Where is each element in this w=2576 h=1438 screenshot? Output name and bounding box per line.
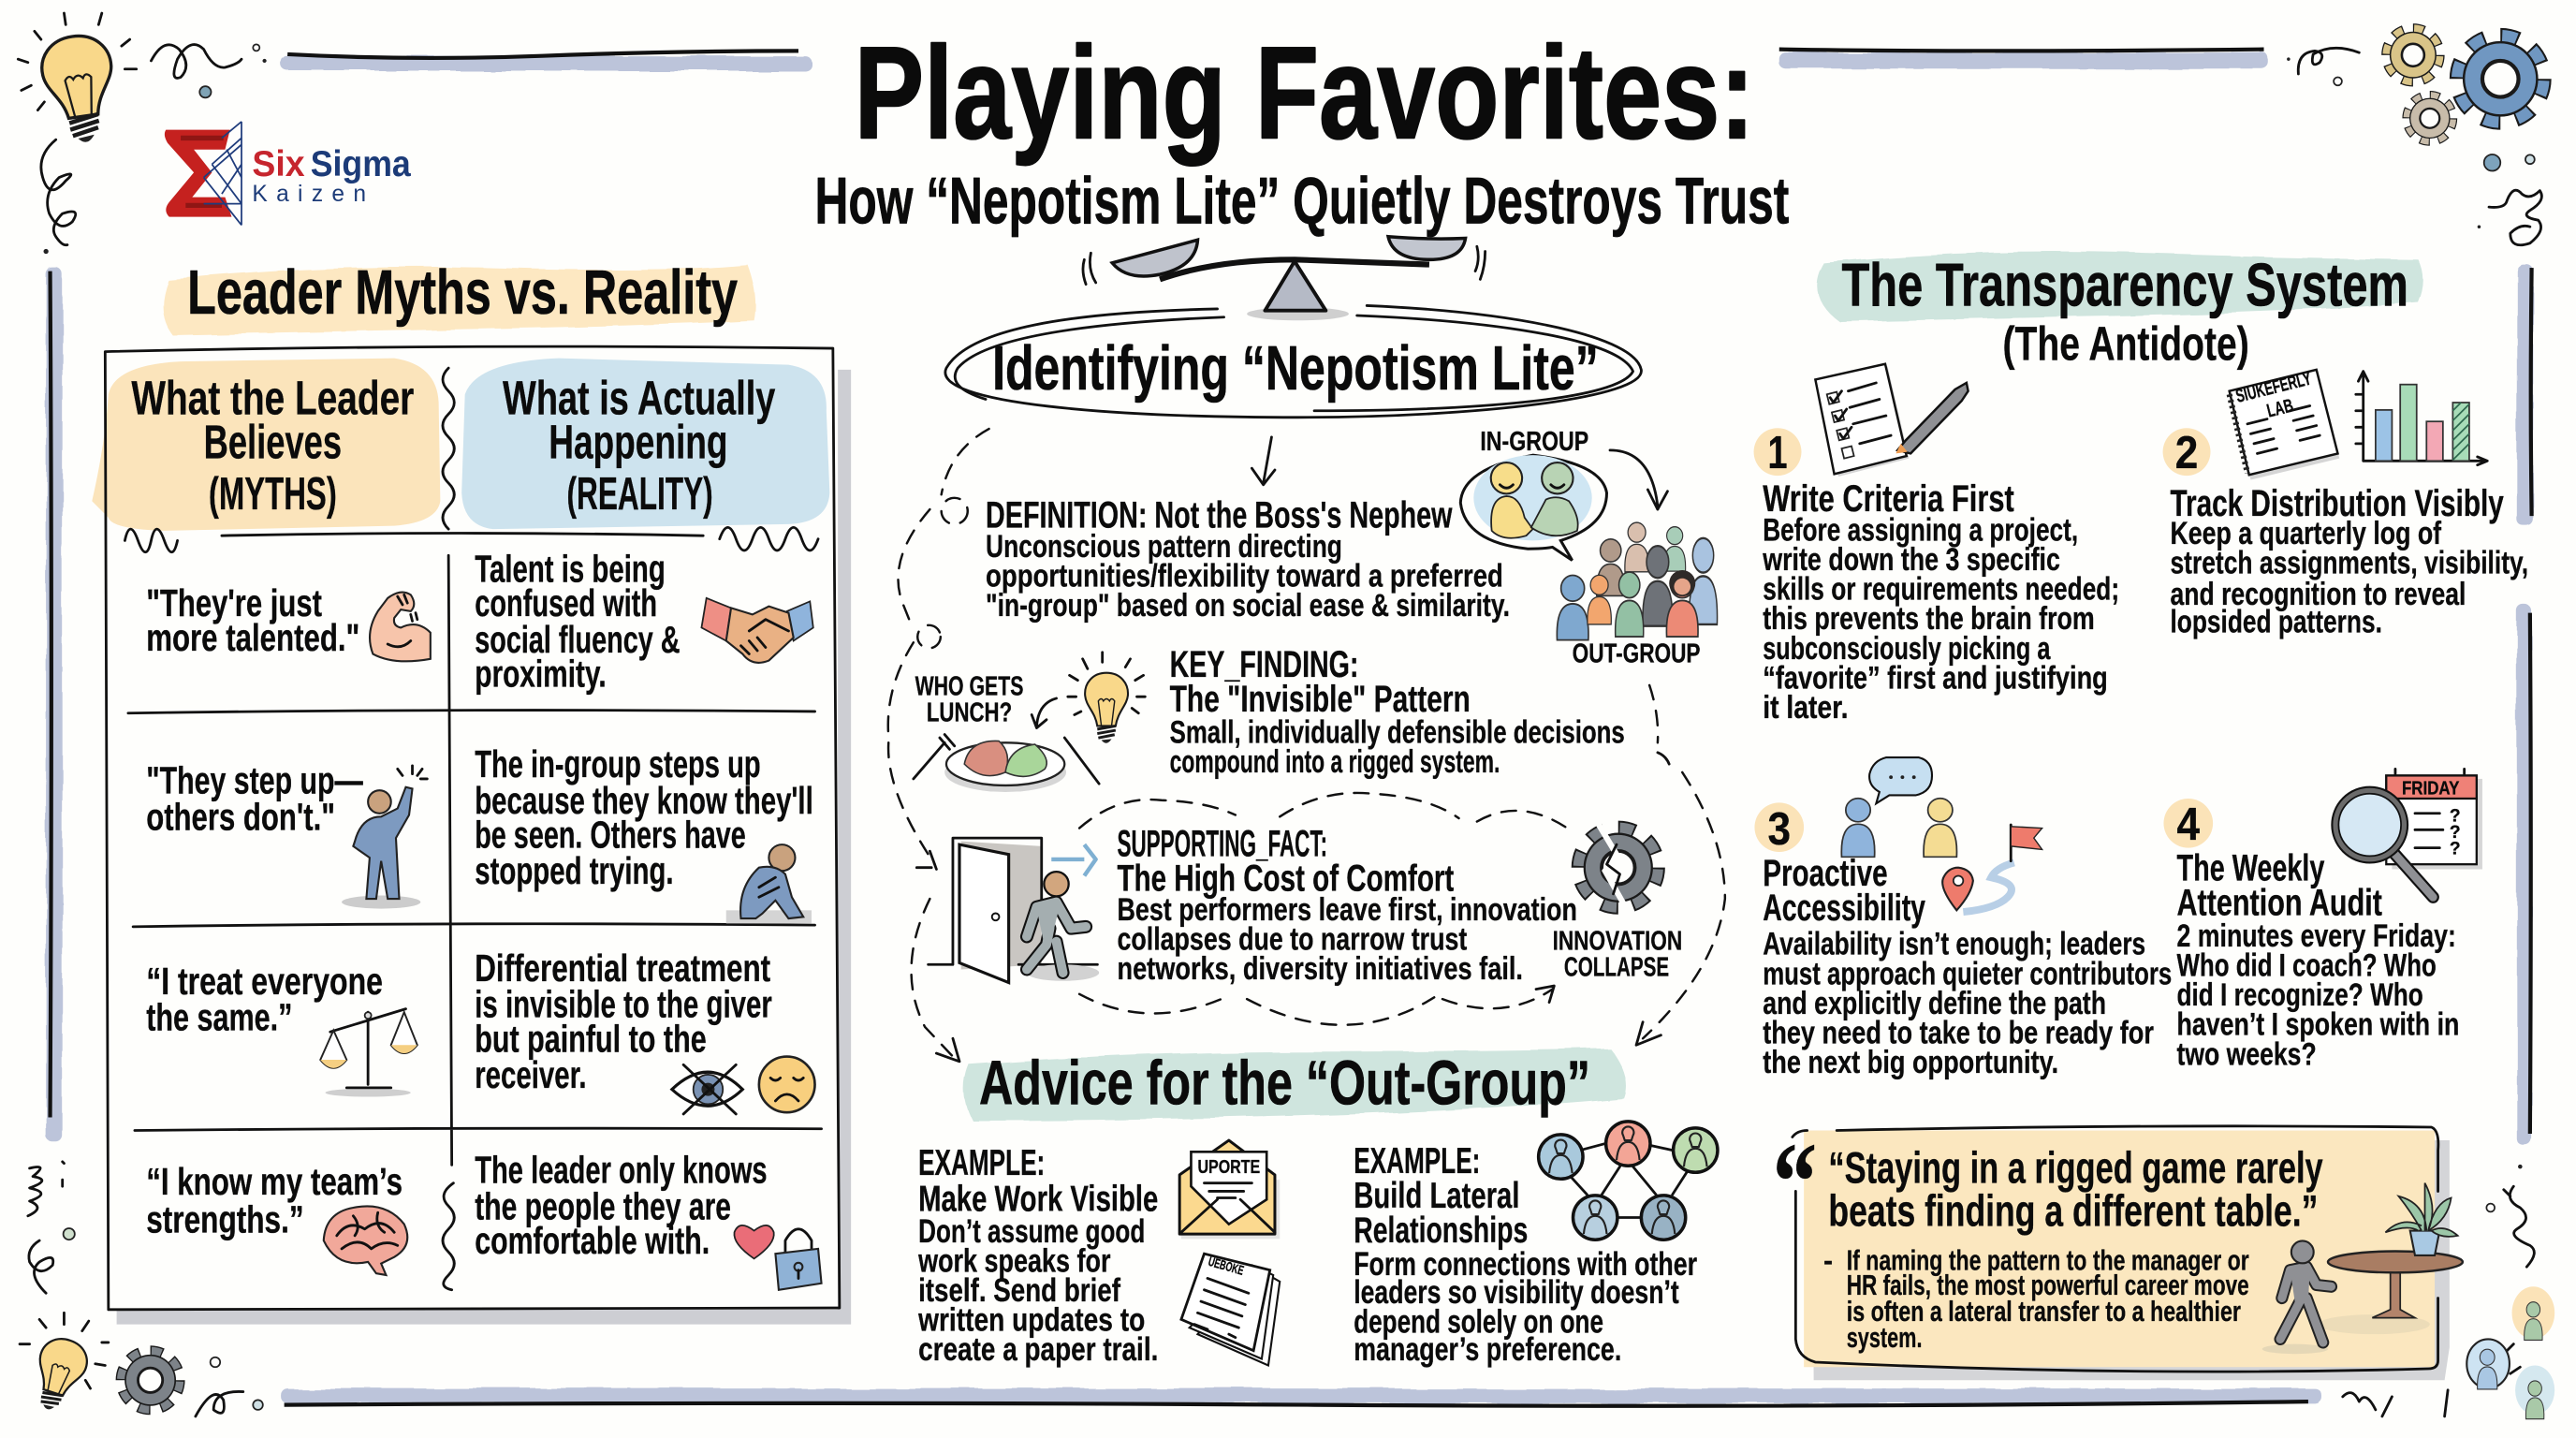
table header: reality (461, 359, 829, 529)
badge 1: 1 (1767, 428, 1788, 478)
squiggle top left (41, 44, 267, 254)
icon: gear bottom left (123, 1352, 178, 1408)
label: who gets lunch: LUNCH? (927, 697, 1012, 727)
text: Attention Audit (2177, 883, 2382, 924)
quote text (1828, 1144, 2323, 1236)
icon: sad face (759, 1057, 815, 1112)
icon: logbook: SIUKEFERLY (2233, 368, 2314, 407)
quote detail: is often a lateral transfer to a healthier (1847, 1295, 2241, 1328)
panel: myths vs reality table (92, 346, 851, 1325)
text: supporting fact (1117, 823, 1577, 987)
squiggle bottom left 2 (196, 1357, 263, 1416)
icon: lunch plate (914, 735, 1099, 792)
icon: balance scale (320, 1009, 417, 1097)
badge 2 (2163, 428, 2210, 478)
table header: reality: Happening (549, 416, 728, 469)
table header: reality: What is Actually (503, 371, 776, 424)
text: key finding (1170, 644, 1625, 780)
icon: person raising hand (342, 766, 427, 909)
text: they need to take to be ready for (1763, 1015, 2154, 1050)
doodles bottom right (2343, 1165, 2534, 1416)
icon: crossed-out eye (672, 1064, 742, 1114)
text: build lateral relationships: Relationships (1354, 1211, 1528, 1251)
badge 3 (1754, 802, 1804, 855)
step 2: track distribution visibly (2163, 368, 2528, 640)
text: build lateral relationships: Build Lateral (1354, 1176, 1519, 1216)
text: definition (986, 494, 1510, 624)
label: innovation collapse (1553, 926, 1682, 983)
icon: lightbulb idea (1032, 653, 1145, 743)
text: supporting fact: networks, diversity initiatives fail. (1117, 951, 1523, 987)
row 2: myth (146, 759, 363, 838)
text: 2 minutes every Friday: (2177, 918, 2456, 954)
doodles right top (2478, 154, 2541, 245)
text: Before assigning a project, (1763, 512, 2078, 548)
icon: lightbulb bottom left (20, 1313, 109, 1416)
row 4: reality: the people they are (475, 1184, 731, 1227)
row 3: reality: but painful to the (475, 1017, 707, 1060)
text (1762, 478, 2119, 726)
text: “favorite” first and justifying (1763, 660, 2108, 696)
icon: envelope with update letter: UPORTE (1197, 1157, 1260, 1178)
panel: quote callout (1773, 1120, 2463, 1380)
row 3: reality (475, 946, 772, 1096)
heading: subtitle: How “Nepotism Lite” Quietly Destroys Trust (815, 164, 1789, 238)
icon: tilted scale (1083, 237, 1486, 320)
quote text: beats finding a different table.” (1828, 1186, 2318, 1236)
text: build lateral relationships: depend solely on one (1354, 1303, 1603, 1340)
row 1: reality (475, 547, 681, 696)
row 4: reality: The leader only knows (475, 1149, 768, 1192)
icon: checklist and pen (1815, 364, 1969, 477)
text: Write Criteria First (1763, 478, 2014, 520)
row 2: reality: be seen. Others have (475, 814, 746, 857)
icon: broken gear (1580, 822, 1656, 923)
row 2: reality: because they know they'll (475, 779, 813, 822)
text: make work visible: Make Work Visible (918, 1180, 1158, 1220)
arrow: in-group to out-group (1610, 450, 1667, 509)
icon: heart (734, 1225, 774, 1258)
icon: logbook: LAB (2265, 396, 2295, 422)
text: write down the 3 specific (1762, 542, 2060, 578)
table header: myths: (MYTHS) (209, 469, 337, 520)
icon: friday calendar and magnifier (2332, 769, 2482, 897)
row 4: myth: “I know my team’s (146, 1160, 402, 1203)
squiggle top right (2287, 48, 2359, 85)
icon: pin, path and flag (1942, 825, 2042, 912)
icon: brain (324, 1206, 407, 1275)
label: who gets lunch (915, 671, 1023, 727)
squiggles bottom left (28, 1162, 75, 1293)
badge 4 (2163, 799, 2213, 850)
label: innovation collapse: INNOVATION (1553, 926, 1682, 956)
row 2: myth: "They step up— (146, 759, 363, 802)
step 3: proactive accessibility (1754, 757, 2172, 1080)
text: skills or requirements needed; (1763, 572, 2119, 608)
row 1: myth: more talented." (146, 616, 359, 659)
quote detail: - (1823, 1246, 1833, 1277)
icon: stack of papers (1181, 1254, 1280, 1365)
row 2: reality: stopped trying. (475, 849, 674, 892)
badge 1 (1754, 428, 1801, 478)
icon: stack of papers: UEBOKE (1207, 1254, 1246, 1278)
text: lopsided patterns. (2170, 605, 2382, 640)
subheading: the antidote: (The Antidote) (2002, 316, 2249, 370)
text: this prevents the brain from (1763, 601, 2095, 637)
logo wordmark: Kaizen (252, 182, 374, 207)
quote mark: “ (1773, 1120, 1817, 1243)
icon: padlock (775, 1229, 822, 1290)
table header: myths: Believes (204, 416, 342, 469)
heading: title (815, 19, 1789, 238)
row 4: reality (475, 1149, 768, 1262)
row 4: reality: comfortable with. (475, 1219, 710, 1262)
row 2: reality (475, 742, 813, 892)
heading: leader myths vs reality (162, 258, 755, 335)
row 3: myth: the same.” (146, 995, 292, 1038)
icon: handshake (701, 598, 813, 663)
heading: the transparency system: The Transparency System (1841, 250, 2408, 318)
icon: friday calendar and magnifier: ? (2450, 823, 2461, 843)
icon: gears top right (2388, 30, 2541, 140)
icon: friday calendar and magnifier: ? (2450, 807, 2461, 827)
row 1: reality: proximity. (475, 653, 607, 696)
heading: the transparency system (1817, 250, 2423, 370)
heading: title: Playing Favorites: (855, 19, 1754, 166)
text: make work visible: itself. Send brief (918, 1272, 1120, 1309)
row 2: reality: The in-group steps up (475, 742, 761, 785)
text: The Weekly (2177, 848, 2324, 889)
heading: leader myths vs reality: Leader Myths vs. Reality (187, 258, 738, 328)
row 4: myth: strengths.” (146, 1197, 304, 1240)
icon: lightbulb top left (18, 13, 137, 147)
quote text: “Staying in a rigged game rarely (1828, 1144, 2323, 1194)
quote detail: If naming the pattern to the manager or (1847, 1244, 2249, 1277)
text: build lateral relationships: Form connections with other (1354, 1246, 1697, 1283)
text: haven’t I spoken with in (2177, 1007, 2459, 1043)
logo: Six Sigma Kaizen (165, 122, 411, 225)
icon: out-group crowd (1557, 522, 1718, 640)
text: definition: DEFINITION: Not the Boss's Nephew (986, 494, 1453, 536)
text: make work visible: written updates to (917, 1302, 1145, 1339)
icon: people bottom right (2466, 1286, 2554, 1419)
icon: friday calendar and magnifier: FRIDAY (2402, 779, 2460, 800)
row 3: myth: “I treat everyone (146, 960, 383, 1003)
badge 2: 2 (2175, 428, 2198, 478)
text: subconsciously picking a (1763, 631, 2051, 667)
text: build lateral relationships (1354, 1141, 1697, 1368)
text: key finding: compound into a rigged system. (1170, 744, 1500, 780)
text: Proactive (1763, 853, 1888, 894)
row 1: myth (146, 581, 359, 659)
text: and recognition to reveal (2170, 577, 2466, 612)
row 4: myth (146, 1160, 402, 1240)
quote detail (1823, 1244, 2249, 1354)
text: supporting fact: Best performers leave first, innovation (1117, 892, 1577, 928)
text: definition: "in-group" based on social ease & similarity. (986, 588, 1510, 624)
icon: person leaving through door (929, 838, 1099, 983)
row 3: myth (146, 960, 383, 1038)
icon: person sitting dejected (726, 844, 812, 923)
row 1: reality: Talent is being (475, 547, 666, 590)
dashed flow connectors (888, 429, 1725, 1062)
text: make work visible (917, 1143, 1158, 1368)
text: two weeks? (2177, 1036, 2317, 1072)
heading: identifying nepotism lite: Identifying “Nepotism Lite” (992, 334, 1599, 404)
text: and explicitly define the path (1763, 986, 2106, 1021)
text (2170, 483, 2528, 640)
quote detail: HR fails, the most powerful career move (1847, 1269, 2249, 1301)
text: build lateral relationships: leaders so visibility doesn’t (1354, 1274, 1679, 1311)
text (2177, 848, 2459, 1072)
text: definition: opportunities/flexibility toward a preferred (986, 559, 1503, 594)
icon: friday calendar and magnifier: ? (2450, 840, 2461, 859)
row 1: reality: confused with (475, 581, 657, 624)
row 3: reality: is invisible to the giver (475, 982, 772, 1025)
quote detail: system. (1847, 1321, 1922, 1354)
icon: person walking to table with plant (2262, 1183, 2463, 1354)
text: did I recognize? Who (2177, 977, 2423, 1013)
text: definition: Unconscious pattern directing (986, 529, 1342, 565)
icon: people network (1539, 1122, 1718, 1240)
text: Keep a quarterly log of (2170, 516, 2442, 551)
icon: bar chart (2356, 372, 2487, 465)
row 1: myth: "They're just (146, 581, 322, 624)
text: build lateral relationships: manager’s preference. (1354, 1331, 1621, 1368)
row 3: reality: Differential treatment (475, 946, 770, 990)
text: Who did I coach? Who (2177, 948, 2437, 984)
text: Availability isn’t enough; leaders (1763, 927, 2145, 962)
text: must approach quieter contributors (1763, 956, 2172, 991)
icon: people talking (1841, 757, 1956, 857)
icon: in-group speech bubble (1460, 427, 1606, 560)
text: supporting fact: collapses due to narrow trust (1117, 921, 1467, 957)
icon: logbook (2230, 368, 2339, 479)
text: make work visible: work speaks for (917, 1242, 1111, 1279)
label: who gets lunch: WHO GETS (915, 671, 1023, 701)
text: key finding: The "Invisible" Pattern (1170, 679, 1471, 720)
text: supporting fact: The High Cost of Comfort (1117, 858, 1454, 899)
text: build lateral relationships: EXAMPLE: (1354, 1141, 1480, 1181)
text: the next big opportunity. (1763, 1045, 2058, 1080)
badge 3: 3 (1767, 804, 1791, 855)
text: Accessibility (1763, 888, 1925, 929)
label: innovation collapse: COLLAPSE (1564, 953, 1669, 983)
row 3: reality: receiver. (475, 1053, 587, 1096)
text: it later. (1763, 690, 1848, 726)
icon: flexed arm (370, 593, 431, 661)
text: supporting fact: SUPPORTING_FACT: (1117, 823, 1327, 864)
badge 4: 4 (2177, 800, 2201, 850)
table header: reality: (REALITY) (567, 469, 713, 520)
row 1: reality: social fluency & (475, 618, 681, 661)
step 4: weekly attention audit (2163, 769, 2482, 1072)
logo wordmark (252, 144, 411, 207)
text: make work visible: EXAMPLE: (918, 1143, 1045, 1183)
label: out-group: OUT-GROUP (1573, 638, 1701, 668)
text: make work visible: Don’t assume good (918, 1213, 1145, 1250)
text: make work visible: create a paper trail. (918, 1331, 1158, 1368)
text (1763, 853, 2172, 1080)
row 2: myth: others don't." (146, 795, 335, 838)
icon: envelope with update letter (1179, 1140, 1280, 1239)
label: in-group: IN-GROUP (1480, 427, 1588, 457)
heading: advice for the out-group: Advice for the “Out-Group” (979, 1049, 1590, 1118)
text: key finding: Small, individually defensible decisions (1170, 714, 1625, 750)
table header: myths: What the Leader (131, 371, 414, 424)
table header: myths (92, 359, 440, 531)
logo wordmark: Sigma (311, 144, 411, 184)
logo wordmark: Six (252, 144, 305, 184)
heading: identifying nepotism lite (945, 305, 1641, 418)
text: key finding: KEY_FINDING: (1170, 644, 1358, 685)
step 1: write criteria first (1754, 364, 2119, 726)
